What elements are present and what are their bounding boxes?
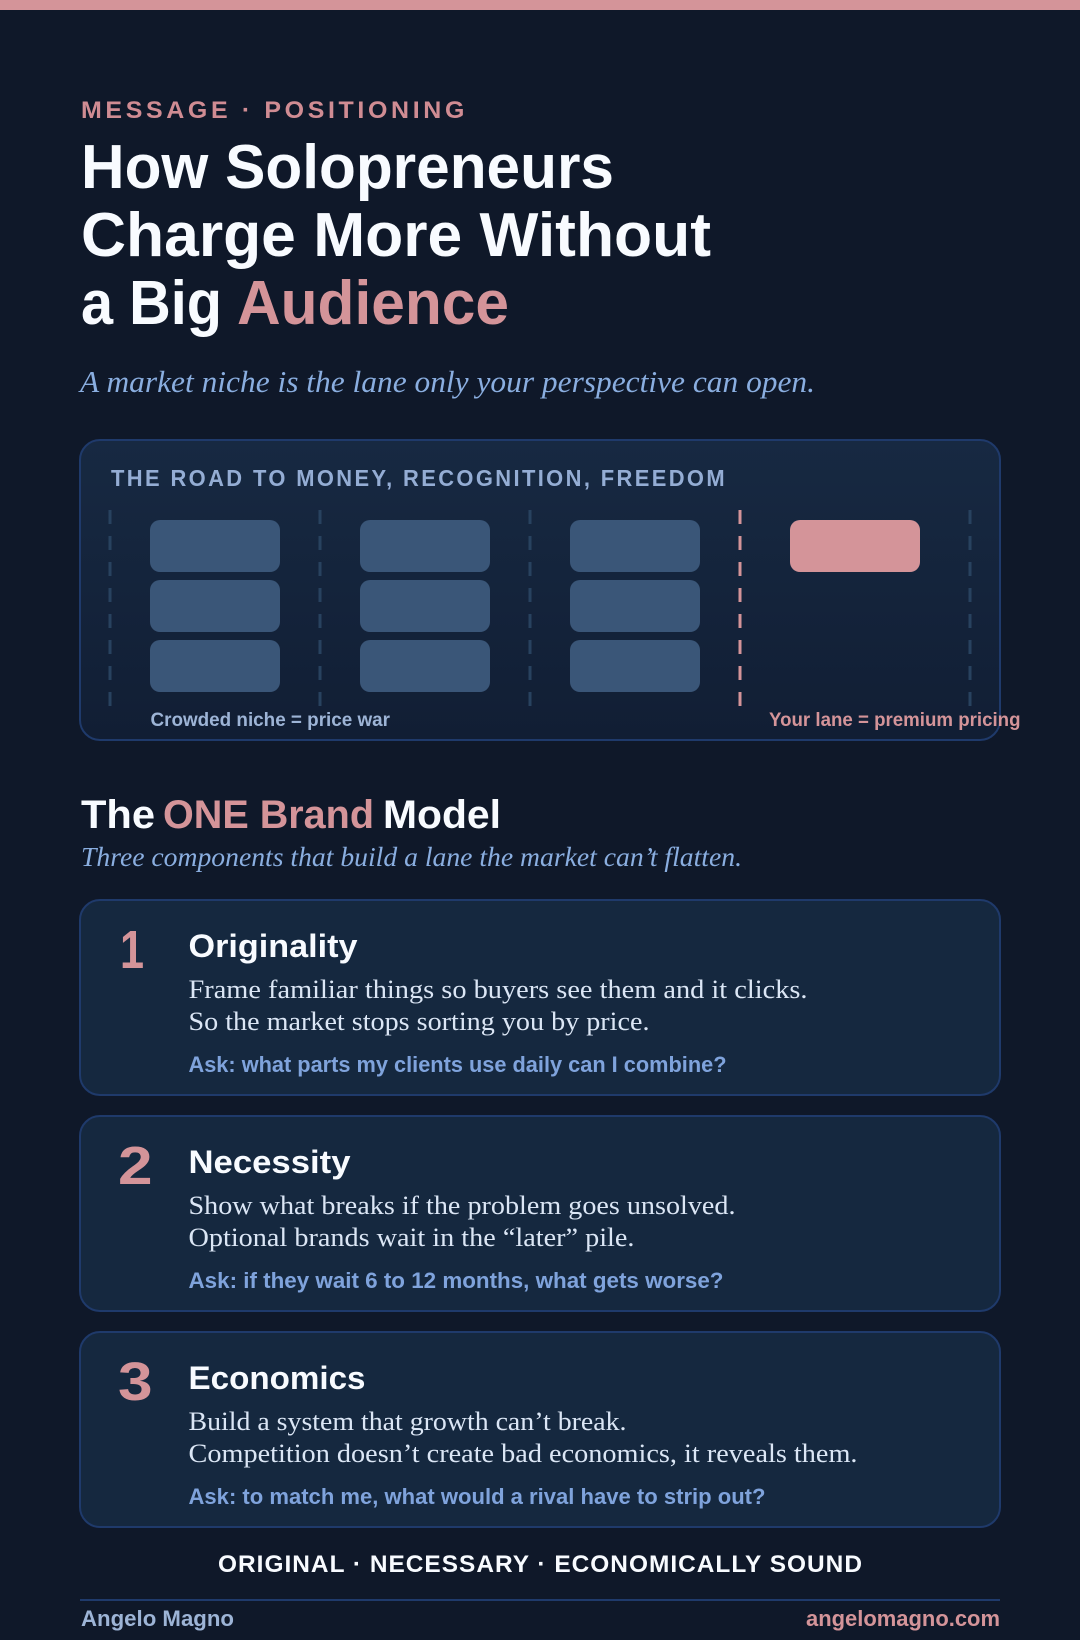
card 1: originality bbox=[80, 900, 1000, 1095]
summary line: ORIGINAL · NECESSARY · ECONOMICALLY SOUND bbox=[218, 1551, 863, 1578]
card 2: necessity bbox=[80, 1116, 1000, 1311]
section heading: Model bbox=[383, 793, 501, 837]
number 1: 1 bbox=[120, 921, 144, 980]
ask prompt: Ask: what parts my clients use daily can I combine? bbox=[188, 1052, 726, 1077]
card 3: economics bbox=[80, 1332, 1000, 1527]
crowded lane blocks bbox=[150, 520, 700, 692]
number 3: 3 bbox=[118, 1352, 153, 1412]
body bbox=[188, 974, 808, 1036]
section heading: The bbox=[81, 793, 155, 837]
header block bbox=[78, 97, 815, 399]
body bbox=[188, 1406, 858, 1468]
section subtitle: Three components that build a lane the market can’t flatten. bbox=[81, 841, 742, 872]
panel: road diagram bbox=[80, 440, 1020, 740]
ask prompt: Ask: if they wait 6 to 12 months, what gets worse? bbox=[188, 1268, 724, 1293]
your lane block bbox=[790, 520, 920, 572]
body: Competition doesn’t create bad economics, it reveals them. bbox=[188, 1438, 858, 1468]
title bbox=[81, 133, 711, 338]
panel heading: THE ROAD TO MONEY, RECOGNITION, FREEDOM bbox=[111, 465, 727, 491]
heading: Necessity bbox=[188, 1144, 351, 1180]
eyebrow: MESSAGE · POSITIONING bbox=[81, 97, 468, 124]
body: Build a system that growth can’t break. bbox=[188, 1406, 626, 1436]
body: Show what breaks if the problem goes unsolved. bbox=[188, 1190, 736, 1220]
website: angelomagno.com bbox=[806, 1606, 1000, 1631]
body: Frame familiar things so buyers see them and it clicks. bbox=[188, 974, 808, 1004]
number 2: 2 bbox=[118, 1136, 153, 1196]
body bbox=[188, 1190, 736, 1252]
author: Angelo Magno bbox=[81, 1606, 234, 1631]
lane dividers bbox=[110, 510, 970, 706]
label: your lane: Your lane = premium pricing bbox=[769, 710, 1020, 731]
title: How Solopreneurs bbox=[81, 133, 614, 202]
body: Optional brands wait in the “later” pile. bbox=[188, 1222, 634, 1252]
footer bbox=[80, 1599, 1000, 1631]
title: Audience bbox=[237, 269, 509, 338]
label: crowded niche: Crowded niche = price war bbox=[150, 710, 391, 731]
body: So the market stops sorting you by price. bbox=[188, 1006, 650, 1036]
title: a Big bbox=[81, 269, 222, 338]
section heading: ONE Brand bbox=[163, 793, 374, 837]
subtitle: A market niche is the lane only your perspective can open. bbox=[78, 364, 815, 399]
section heading bbox=[81, 793, 501, 837]
ask prompt: Ask: to match me, what would a rival have to strip out? bbox=[188, 1484, 766, 1509]
title: Charge More Without bbox=[81, 201, 711, 270]
heading: Economics bbox=[188, 1360, 366, 1396]
heading: Originality bbox=[188, 928, 358, 964]
top accent bar bbox=[0, 0, 1080, 10]
